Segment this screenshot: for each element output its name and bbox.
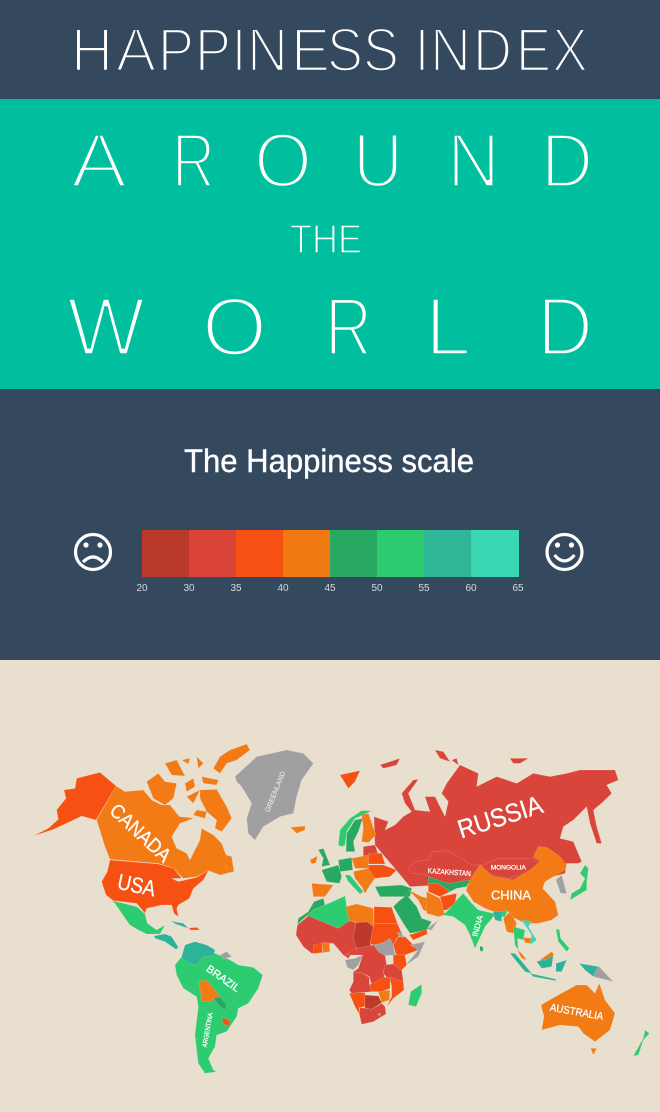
- labels: Russia, Kazakhstan, Mongolia: MONGOLIA: [491, 865, 526, 871]
- heading: Around: N: [447, 118, 500, 204]
- world map: Africa and Middle East: [296, 890, 440, 1024]
- Egypt: [374, 907, 397, 923]
- Ethiopia: [393, 937, 418, 955]
- Thailand: [513, 927, 525, 950]
- Spain: [312, 883, 333, 897]
- title: Happiness Index: I: [232, 16, 246, 84]
- Venezuela and Colombia: [182, 942, 215, 965]
- Germany: [338, 858, 353, 872]
- Balkans: [353, 868, 375, 893]
- legend: happiness scale colour bar: 20: [136, 583, 148, 594]
- heading: Around: D: [541, 118, 593, 204]
- labels: Canada and USA: USA: [115, 869, 158, 901]
- Iran east: [427, 892, 445, 917]
- title: Happiness Index: H: [71, 16, 113, 84]
- Vietnam: [522, 920, 537, 945]
- heading: Around: A: [71, 118, 128, 204]
- heading: World: R: [325, 280, 372, 373]
- world map: Arctic islands: [340, 750, 528, 788]
- heading: The: THE: [290, 216, 362, 262]
- labels: Brazil, Argentina, Greenland: ARGENTINA: [202, 1012, 215, 1048]
- Mozambique: [387, 977, 404, 1007]
- title: Happiness Index: P: [195, 16, 231, 84]
- Kenya: [393, 955, 407, 970]
- title: Happiness Index: S: [327, 16, 363, 84]
- labels: Brazil, Argentina, Greenland: GREENLAND: [265, 771, 287, 813]
- heading: World: O: [202, 280, 267, 373]
- Eritrea: [397, 932, 403, 938]
- Caribbean: [171, 921, 188, 928]
- Central America: [154, 934, 178, 949]
- title: Happiness Index: E: [291, 16, 330, 84]
- Canada: [97, 744, 250, 878]
- heading: World: D: [537, 280, 593, 373]
- Madagascar: [408, 984, 422, 1007]
- New Zealand: [633, 1030, 649, 1056]
- Chad: [353, 922, 373, 948]
- icon: sad face: [76, 534, 110, 570]
- heading: Around: U: [353, 118, 403, 204]
- Turkey: [375, 885, 412, 897]
- title: Happiness Index: P: [158, 16, 194, 84]
- Uruguay: [223, 1017, 231, 1026]
- world map: Greenland, Central and South America: [112, 750, 313, 1073]
- Namibia: [349, 993, 365, 1014]
- Philippines: [556, 929, 569, 952]
- Svalbard: [340, 771, 360, 788]
- Iceland: [291, 826, 305, 833]
- world map: North America: [33, 744, 250, 917]
- Paraguay: [213, 997, 227, 1011]
- labels: Russia, Kazakhstan, Mongolia: KAZAKHSTAN: [427, 866, 471, 878]
- world map: Europe: [310, 811, 412, 897]
- title: Happiness Index: D: [473, 16, 512, 84]
- Italy: [345, 875, 363, 894]
- China: [466, 847, 567, 923]
- Belarus: [368, 853, 385, 864]
- legend: happiness scale colour bar: 65: [512, 583, 524, 594]
- Bolivia: [199, 980, 220, 1002]
- heading: World: L: [425, 280, 471, 373]
- Australia: [541, 983, 615, 1042]
- labels: Brazil, Argentina, Greenland: [202, 771, 287, 1048]
- Sudan: [370, 923, 402, 945]
- world map: Russia, Kazakhstan, Mongolia: [374, 765, 618, 887]
- Korea: [556, 875, 567, 893]
- Russia: [374, 765, 618, 887]
- labels: Russia, Kazakhstan, Mongolia: RUSSIA: [454, 789, 547, 844]
- title: Happiness Index: I: [415, 16, 429, 84]
- Lesotho: [377, 1013, 381, 1017]
- Norway: [338, 811, 372, 847]
- Central Asia: [428, 877, 470, 892]
- India and Pakistan: [443, 893, 508, 948]
- Myanmar: [503, 912, 517, 933]
- legend: happiness scale colour bar: 35: [230, 583, 242, 594]
- New Guinea: [579, 963, 598, 977]
- title: Happiness Index: S: [363, 16, 399, 84]
- Kazakhstan: [408, 851, 482, 883]
- Tanzania: [383, 964, 403, 983]
- Bangladesh: [493, 912, 502, 922]
- Central Africa: [345, 945, 387, 985]
- France: [322, 865, 342, 883]
- Poland: [352, 855, 368, 868]
- labels: Russia, Kazakhstan, Mongolia: [427, 789, 547, 878]
- Angola: [349, 972, 372, 993]
- labels: Canada and USA: [105, 800, 175, 901]
- Japan: [570, 865, 588, 900]
- heading: Around: O: [254, 118, 312, 204]
- Indonesia: [510, 953, 532, 973]
- Saudi Arabia and neighbours: [393, 895, 432, 933]
- Zambia: [369, 977, 390, 992]
- labels: China, India, Australia: INDIA: [470, 914, 485, 938]
- Mongolia: [480, 858, 538, 878]
- Russian Arctic islands: [380, 750, 528, 768]
- Guyana: [220, 952, 232, 959]
- Yemen: [409, 929, 427, 940]
- heading: Around: R: [172, 118, 215, 204]
- West Africa: [296, 916, 357, 958]
- legend: happiness scale colour bar: 40: [277, 583, 289, 594]
- title: Happiness Index: N: [247, 16, 288, 84]
- South America: [175, 953, 263, 1073]
- labels: China, India, Australia: CHINA: [491, 888, 532, 902]
- subheading: The Happiness scale: The Happiness scale: [184, 443, 474, 479]
- United Kingdom: [318, 848, 330, 867]
- labels: Brazil, Argentina, Greenland: BRAZIL: [204, 963, 242, 995]
- Malaysia: [517, 950, 527, 960]
- Cambodia: [523, 937, 532, 943]
- Alaska: [33, 772, 116, 836]
- title: Happiness Index: A: [116, 16, 156, 84]
- South Africa: [359, 1003, 386, 1024]
- Afghanistan: [440, 893, 457, 910]
- legend: happiness scale colour bar: 30: [183, 583, 195, 594]
- Gulf of Guinea countries: [313, 943, 322, 953]
- Algeria: [307, 896, 349, 928]
- labels: China, India, Australia: [470, 888, 605, 1023]
- Ireland: [310, 856, 317, 864]
- labels: China, India, Australia: AUSTRALIA: [549, 1002, 605, 1023]
- Somalia: [406, 942, 425, 965]
- legend: happiness scale colour bar: 55: [418, 583, 430, 594]
- legend: happiness scale colour bar: [136, 530, 524, 594]
- title: Happiness Index: N: [430, 16, 471, 84]
- Zimbabwe: [378, 990, 390, 1003]
- Gabon: [345, 955, 363, 970]
- title: Happiness Index: X: [552, 16, 588, 84]
- icon: happy face: [547, 534, 582, 570]
- world map: Asia and Oceania: [427, 847, 649, 1056]
- Sweden: [346, 818, 363, 852]
- heading: World: W: [67, 280, 146, 373]
- legend: happiness scale colour bar: 45: [324, 583, 336, 594]
- Ukraine: [368, 865, 397, 878]
- Mexico: [112, 901, 165, 934]
- Finland: [362, 813, 376, 843]
- Greenland: [235, 750, 313, 840]
- Iran: [408, 890, 440, 917]
- Libya: [346, 904, 374, 927]
- Botswana: [365, 995, 382, 1009]
- labels: Canada and USA: CANADA: [105, 800, 175, 868]
- title: Happiness Index: E: [516, 16, 551, 84]
- USA: [102, 860, 208, 917]
- legend: happiness scale colour bar: 50: [371, 583, 383, 594]
- South Sudan: [373, 938, 395, 956]
- Oman: [427, 920, 438, 930]
- legend: happiness scale colour bar: 60: [465, 583, 477, 594]
- Morocco: [297, 898, 325, 924]
- Baltics: [363, 845, 378, 857]
- Sri Lanka: [480, 946, 483, 952]
